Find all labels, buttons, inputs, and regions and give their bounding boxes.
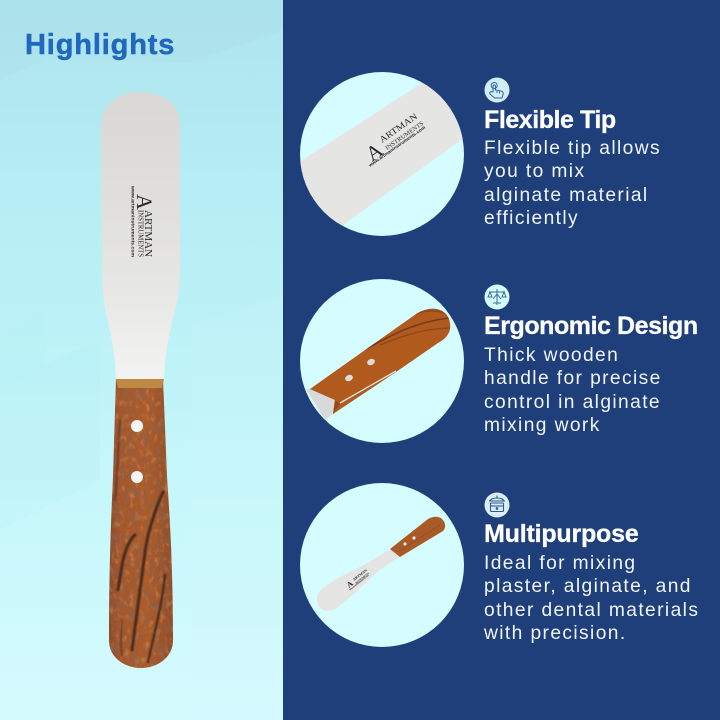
text: flexible tip description: efficiently xyxy=(484,208,579,229)
circle 1 logo xyxy=(361,111,426,168)
text: flexible tip description: Flexible tip allows xyxy=(484,138,661,159)
small logo: www.artmaninstruments.com xyxy=(349,574,370,591)
text: multipurpose description: other dental materials xyxy=(484,600,699,621)
heading: ergonomic design: Ergonomic Design xyxy=(484,312,698,340)
blade logo: INSTRUMENTS xyxy=(136,210,144,257)
heading: flexible tip: Flexible Tip xyxy=(484,106,616,134)
text: ergonomic design description: handle for precise xyxy=(484,368,662,389)
small logo: ARTMAN xyxy=(352,568,368,582)
rivets xyxy=(131,420,143,432)
text: ergonomic design description xyxy=(484,345,662,436)
text: flexible tip description xyxy=(484,138,661,229)
spatula: main product xyxy=(101,92,180,672)
blade xyxy=(101,92,180,379)
circle 1 logo: www.artmaninstruments.com xyxy=(367,125,426,168)
text: multipurpose description: Ideal for mixing xyxy=(484,553,637,574)
blade logo: www.artmaninstruments.com xyxy=(130,185,136,257)
icon: cooking pot xyxy=(484,492,510,518)
blade logo xyxy=(130,185,157,257)
text: ergonomic design description: Thick wooden xyxy=(484,345,619,366)
text: ergonomic design description: control in alginate xyxy=(484,392,661,413)
panel: highlights background xyxy=(0,0,283,720)
small logo: A xyxy=(345,579,355,590)
icon: balance scale xyxy=(484,284,510,310)
handle xyxy=(310,309,450,414)
circle: ergonomic handle photo xyxy=(300,279,464,443)
rivets xyxy=(344,374,354,382)
circle 1 logo: ARTMAN xyxy=(377,111,420,145)
heading: multipurpose: Multipurpose xyxy=(484,520,639,548)
small logo: INSTRUMENTS xyxy=(355,572,370,585)
small handle xyxy=(390,517,445,557)
text: ergonomic design description: mixing work xyxy=(484,415,601,436)
handle xyxy=(109,379,173,668)
blade logo: A xyxy=(132,194,157,210)
text: multipurpose description: plaster, alginate, and xyxy=(484,576,692,597)
blade logo: ARTMAN xyxy=(142,210,153,257)
icon: pointing hand xyxy=(484,78,510,102)
circle 1 logo: INSTRUMENTS xyxy=(385,121,425,152)
text: multipurpose description xyxy=(484,553,699,644)
text: flexible tip description: you to mix xyxy=(484,161,585,182)
circle 1 logo: A xyxy=(361,137,388,166)
circle: flexible tip photo xyxy=(300,72,464,236)
blade stub xyxy=(306,389,336,420)
panel: dark blue feature column xyxy=(283,0,720,720)
ferrule xyxy=(116,379,164,388)
circle: multipurpose photo xyxy=(300,483,464,647)
small blade xyxy=(317,549,400,611)
small logo xyxy=(345,568,370,591)
text: multipurpose description: with precision. xyxy=(484,623,627,644)
artwork: panels, spatula photos and icons xyxy=(0,0,510,720)
title: Highlights xyxy=(25,29,175,61)
text: flexible tip description: alginate material xyxy=(484,185,649,206)
